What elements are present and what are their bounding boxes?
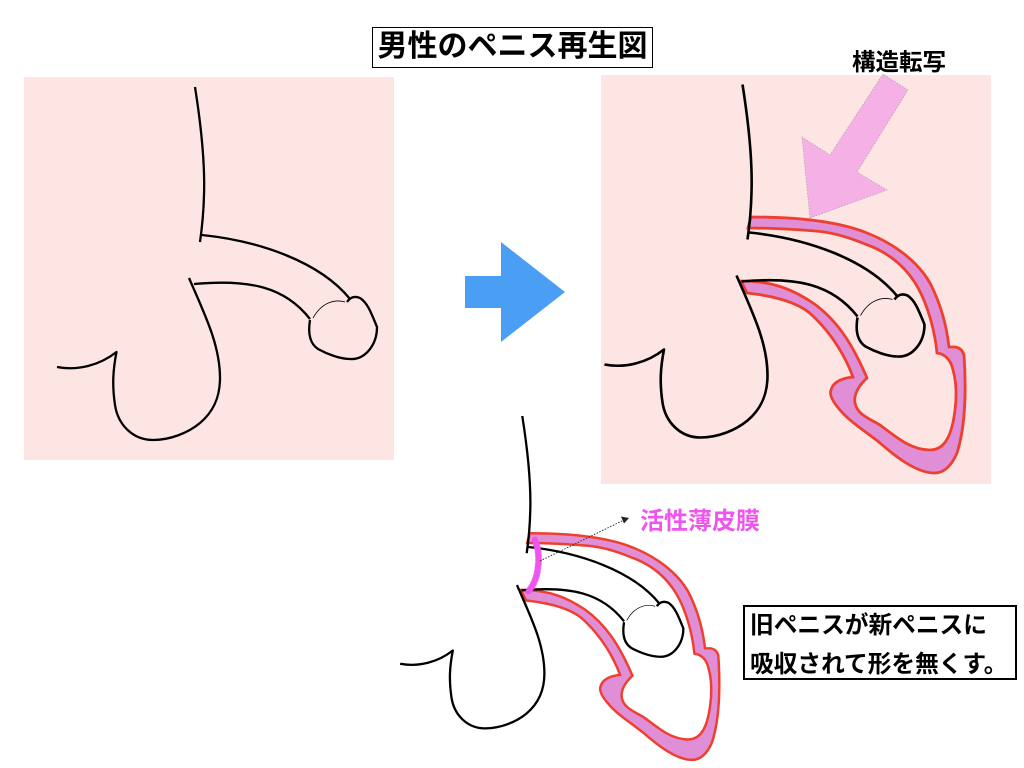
callout: explanation: 旧ペニスが新ペニスに xyxy=(750,613,987,639)
arrow: structure transfer direction xyxy=(802,74,908,218)
active thin membrane xyxy=(528,540,539,592)
callout: explanation: 吸収されて形を無くす。 xyxy=(750,652,1007,678)
panel: before regeneration xyxy=(24,77,394,460)
arrow: progression xyxy=(465,242,565,342)
graft band: transferred layer xyxy=(741,217,965,473)
arrow: membrane pointer xyxy=(540,516,629,561)
graft band: new tissue xyxy=(521,533,719,760)
label: active thin membrane: 活性薄皮膜 xyxy=(640,508,760,535)
diagram: original anatomy outline xyxy=(57,87,377,440)
diagram: regenerated result xyxy=(400,416,719,760)
callout: explanation xyxy=(743,605,1017,680)
label: structure transfer: 構造転写 xyxy=(852,49,946,75)
panel: structure transfer xyxy=(601,74,991,484)
title: 男性のペニス再生図 xyxy=(378,30,648,63)
diagram: anatomy outline with graft xyxy=(604,84,924,438)
diagram: anatomy outline after regeneration xyxy=(400,416,683,728)
